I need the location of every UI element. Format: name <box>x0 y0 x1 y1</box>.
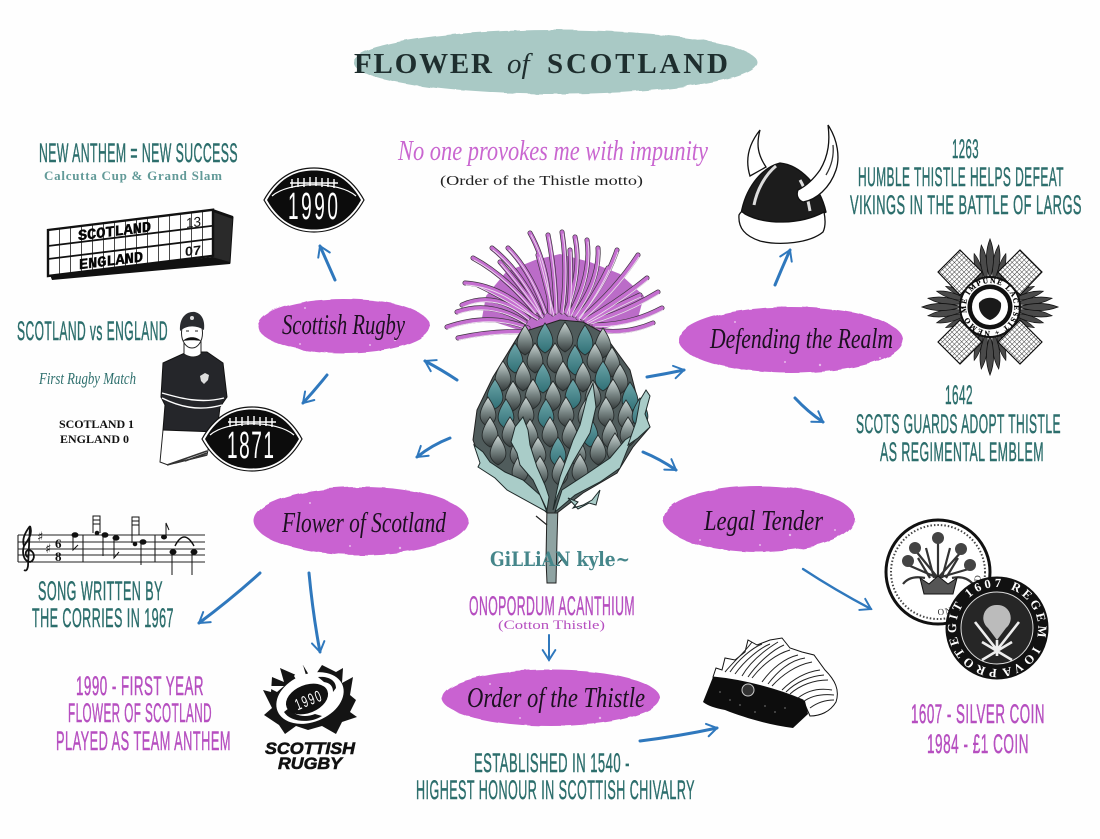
text: 1263 battle of Largs: 1263 <box>952 134 979 164</box>
title banner: FLOWER <box>354 48 493 80</box>
text: first rugby match: First Rugby Match <box>38 369 136 388</box>
text: song written <box>32 576 174 633</box>
text: team anthem: PLAYED AS TEAM ANTHEM <box>56 726 231 756</box>
text: 1642 Scots Guards <box>856 380 1061 467</box>
text: song written: SONG WRITTEN BY <box>38 576 163 606</box>
heading pill: Defending the Realm <box>679 307 903 373</box>
text: 1263 battle of Largs <box>850 134 1082 220</box>
text: song written: THE CORRIES IN 1967 <box>32 603 174 633</box>
arrow: rugby to 1990 <box>320 246 335 280</box>
logo: Scottish Rugby: RUGBY <box>278 754 344 773</box>
text: coins: 1984 - £1 COIN <box>927 729 1029 759</box>
text: team anthem: 1990 - FIRST YEAR <box>76 671 204 701</box>
thistle flower head <box>447 232 663 340</box>
title banner: SCOTLAND <box>547 48 728 80</box>
coin: silver thistle: PROTEGIT 1607 REGEM IOVA <box>948 578 1046 678</box>
text: 1263 battle of Largs: HUMBLE THISTLE HELPS DEFEAT <box>858 162 1064 192</box>
arrow: thistle to Flower of Scotland <box>417 438 450 457</box>
logo: Scottish Rugby: 1990 <box>292 687 324 714</box>
heading pill: Flower of Scotland <box>254 487 468 555</box>
text: 1263 battle of Largs: VIKINGS IN THE BATTLE OF LARGS <box>850 190 1082 220</box>
arrow: realm to helmet <box>775 250 790 285</box>
icon: feathered bonnet <box>703 638 837 728</box>
text: score 1871: SCOTLAND 1 <box>59 417 134 431</box>
text: team anthem: FLOWER OF SCOTLAND <box>68 698 212 728</box>
text: coins <box>911 699 1045 759</box>
arrow: thistle to Legal Tender <box>643 452 676 470</box>
thistle stem <box>536 505 563 583</box>
icon: sheet music: ♯ <box>37 530 43 545</box>
icon: Scots Guards star badge: NEMO ME IMPUNE LACESSIT + <box>961 278 1019 336</box>
arrow: onopordum to order of the thistle <box>548 635 550 660</box>
text: onopordum <box>469 591 635 632</box>
coin: one pound <box>884 518 992 626</box>
icon: sheet music <box>18 516 205 575</box>
arrow: to feathered bonnet <box>640 728 717 741</box>
text: onopordum: ONOPORDUM ACANTHIUM <box>469 591 635 621</box>
text: Scotland vs England: SCOTLAND vs ENGLAND <box>17 316 168 346</box>
text: new anthem: NEW ANTHEM = NEW SUCCESS <box>39 138 238 168</box>
thistle bulb <box>473 320 650 513</box>
text: 1642 Scots Guards: 1642 <box>945 380 973 410</box>
text: coins: 1607 - SILVER COIN <box>911 699 1045 729</box>
arrow: thistle to Scottish Rugby <box>425 361 457 380</box>
icon: scoreboard: 13 <box>186 213 201 231</box>
icon: scoreboard: 07 <box>185 242 201 259</box>
text: order established: ESTABLISHED IN 1540 - <box>474 748 630 778</box>
text: score 1871: ENGLAND 0 <box>60 432 129 446</box>
arrow: rugby to 1871 <box>303 375 327 403</box>
icon: scoreboard: ENGLAND <box>79 248 143 274</box>
icon: Scots Guards star badge <box>921 238 1059 376</box>
heading pill: Order of the Thistle: Order of the Thistle <box>467 682 645 714</box>
text: order established <box>416 748 695 805</box>
thistle pale leaves <box>474 383 650 512</box>
heading pill: Scottish Rugby <box>258 299 430 353</box>
text: team anthem <box>56 671 231 756</box>
icon: rugby ball 1871: 1871 <box>227 425 274 467</box>
icon: sheet music: 8 <box>55 549 62 564</box>
icon: rugby ball 1990: 1990 <box>288 186 338 228</box>
logo: Scottish Rugby <box>263 663 357 773</box>
icon: scoreboard <box>48 209 233 280</box>
text: order established: HIGHEST HONOUR IN SCOTTISH CHIVALRY <box>416 775 695 805</box>
text: onopordum: (Cotton Thistle) <box>498 617 605 632</box>
icon: sheet music: 6 <box>55 536 62 551</box>
heading pill: Order of the Thistle <box>442 670 660 726</box>
text: new anthem: Calcutta Cup & Grand Slam <box>44 168 222 183</box>
icon: viking helmet <box>739 125 838 243</box>
text: new anthem <box>39 138 238 183</box>
text: 1642 Scots Guards: AS REGIMENTAL EMBLEM <box>880 437 1044 467</box>
motto: (Order of the Thistle motto) <box>440 174 643 189</box>
title banner <box>353 30 757 94</box>
icon: sheet music: ♯ <box>45 542 51 557</box>
arrow: flower of scotland to song <box>199 573 260 623</box>
heading pill: Defending the Realm: Defending the Realm <box>709 323 893 355</box>
signature: Gillian Kyle: GiLLiAN kyle~ <box>490 547 630 571</box>
coin: one pound: ONE POUND <box>938 576 981 615</box>
arrow: flower of scotland to logo <box>309 573 320 652</box>
icon: rugby ball 1990 <box>264 168 364 232</box>
arrow: thistle to Defending the Realm <box>647 370 684 377</box>
title banner: of <box>507 48 534 80</box>
logo: Scottish Rugby: SCOTTISH <box>265 739 356 758</box>
motto: No one provokes me with impunity <box>397 135 708 167</box>
icon: silver coins <box>884 518 1048 680</box>
heading pill: Legal Tender <box>663 486 855 552</box>
illustration: thistle <box>447 232 663 583</box>
icon: scoreboard: SCOTLAND <box>78 218 151 245</box>
motto <box>397 135 708 189</box>
arrow: realm to badge <box>795 398 823 422</box>
text: 1642 Scots Guards: SCOTS GUARDS ADOPT THISTLE <box>856 409 1061 439</box>
heading pill: Legal Tender: Legal Tender <box>703 505 824 537</box>
text: score 1871 <box>59 417 134 446</box>
heading pill: Scottish Rugby: Scottish Rugby <box>282 309 405 341</box>
arrow: legal tender to coins <box>803 569 871 609</box>
icon: rugby player <box>160 312 227 465</box>
icon: rugby ball 1871 <box>202 407 302 471</box>
heading pill: Flower of Scotland: Flower of Scotland <box>281 507 446 539</box>
